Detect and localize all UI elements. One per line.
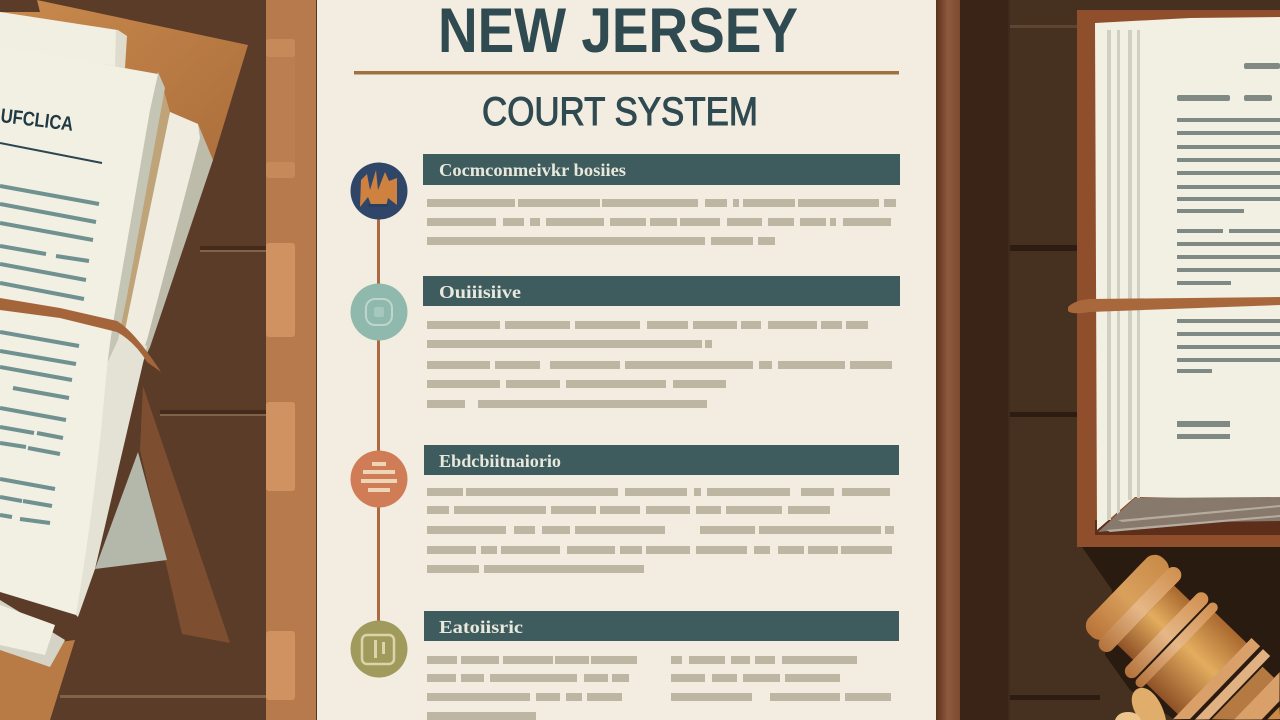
timeline connector bbox=[377, 215, 380, 635]
step 3: icon bbox=[350, 450, 408, 508]
step 2: icon bbox=[350, 284, 408, 340]
step 4: icon bbox=[350, 620, 408, 678]
step 3: text lines bbox=[427, 488, 894, 573]
step 4: header bbox=[424, 611, 899, 641]
sheet heading: UFCLICA bbox=[0, 105, 75, 136]
title rule bbox=[354, 71, 899, 74]
step 2: text lines bbox=[427, 321, 892, 408]
page block bottom bbox=[1098, 497, 1280, 532]
top sheet behind bbox=[0, 12, 127, 68]
open law book bbox=[1068, 10, 1280, 547]
right binder strip bbox=[936, 0, 960, 720]
main sheet side bbox=[90, 72, 165, 400]
lower sheet bbox=[0, 600, 65, 667]
binding strap bbox=[0, 298, 161, 372]
page edges bbox=[1107, 30, 1140, 520]
book text lines bbox=[1177, 63, 1280, 439]
subtitle: COURT SYSTEM bbox=[482, 90, 758, 134]
step 4: header: Eatoiisric bbox=[439, 617, 523, 637]
clipboard lower corner bbox=[0, 640, 75, 720]
left clipboard and paper stack bbox=[0, 0, 248, 720]
step 3: header bbox=[424, 445, 899, 475]
sheet heading rule bbox=[0, 143, 102, 163]
central paper panel bbox=[317, 0, 936, 720]
page stack side bbox=[60, 330, 147, 617]
book and gavel shadow bbox=[1082, 547, 1280, 720]
step 4: text lines bbox=[427, 656, 891, 720]
gavel bbox=[1086, 554, 1280, 720]
step 1: icon bbox=[350, 162, 408, 220]
clipboard bbox=[0, 0, 248, 220]
book strap bbox=[1068, 297, 1280, 313]
left binder strip with tabs bbox=[266, 0, 316, 720]
grey sheet under stack bbox=[95, 452, 167, 569]
wooden triangle support bbox=[140, 386, 230, 643]
back sheet bbox=[100, 112, 213, 420]
step 1: header: Cocmconmeivkr bosiies bbox=[439, 160, 626, 180]
step 2: header bbox=[423, 276, 900, 306]
step 3: header: Ebdcbiitnaiorio bbox=[439, 451, 561, 471]
book page bbox=[1095, 17, 1280, 530]
back sheet face bbox=[125, 112, 200, 400]
step 2: header: Ouiiisiive bbox=[439, 282, 521, 302]
step 1: text lines bbox=[427, 199, 896, 245]
sheet text lines bbox=[0, 186, 99, 523]
main sheet bbox=[0, 46, 158, 615]
tan page edge bbox=[112, 88, 170, 335]
book cover bbox=[1077, 10, 1280, 547]
step 1: header bbox=[423, 154, 900, 185]
